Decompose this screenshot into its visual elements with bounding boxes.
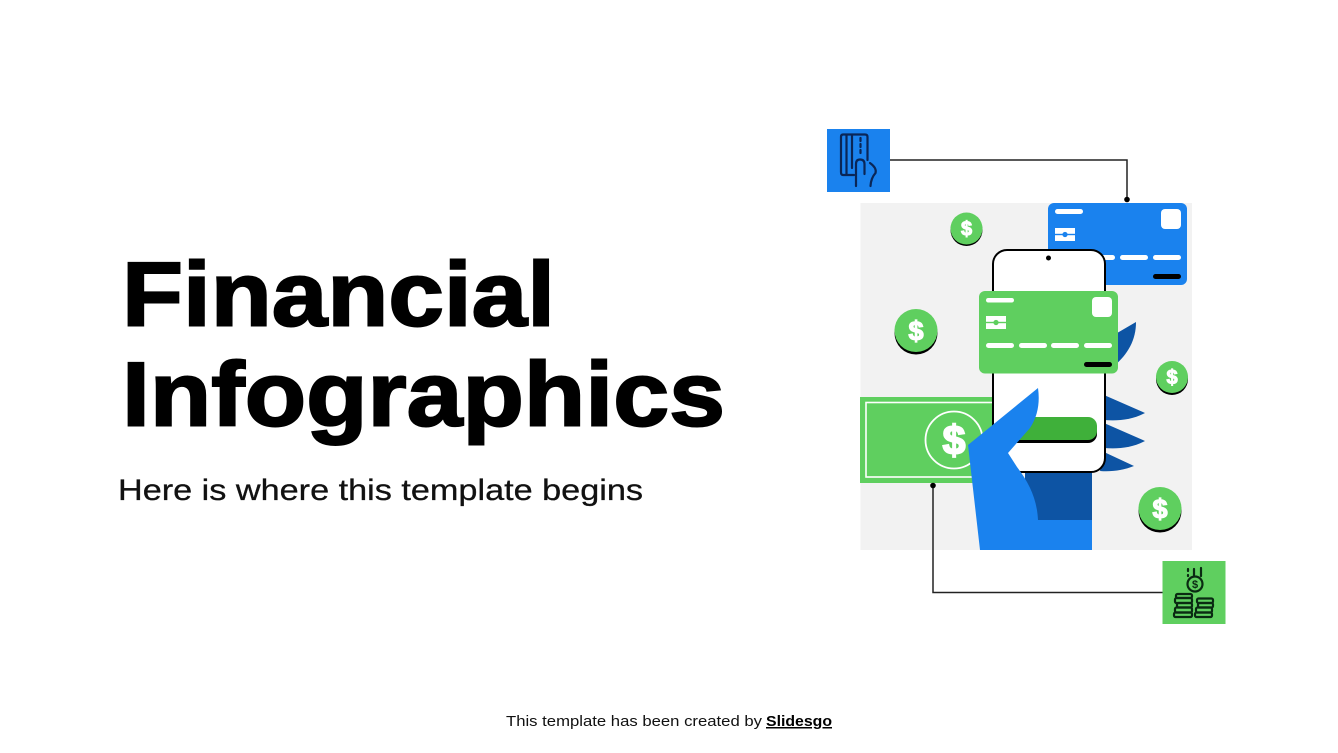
connector: card icon to blue card — [890, 160, 1130, 202]
connector: bill to coins icon — [930, 483, 1163, 592]
dark sleeve — [1025, 470, 1092, 520]
smartphone — [993, 250, 1105, 472]
subtitle: Here is where this template begins — [118, 474, 643, 507]
coin 2 — [894, 309, 938, 354]
hand fingers behind phone — [1100, 322, 1145, 471]
icon: falling coin and stacks — [1162, 561, 1226, 624]
coin 4: $ — [1152, 494, 1168, 524]
coin 3 — [1156, 361, 1188, 395]
title: Financial — [122, 244, 555, 346]
title: Infographics — [122, 344, 725, 446]
footer credit: This template has been created by — [506, 713, 763, 730]
illustration: phone payment scene — [860, 203, 1192, 550]
icon: falling coin and stacks: $ — [1192, 579, 1198, 591]
coin 3: $ — [1166, 367, 1178, 389]
icon: card and hand — [827, 129, 890, 192]
hand — [968, 388, 1092, 550]
coin 2: $ — [908, 316, 924, 346]
footer credit: Slidesgo — [766, 713, 832, 730]
coin 1: $ — [961, 218, 972, 240]
green credit card — [979, 291, 1118, 374]
coin 1 — [950, 212, 982, 246]
coin 4 — [1138, 487, 1182, 532]
dollar bill — [860, 397, 996, 483]
blue credit card — [1048, 203, 1187, 285]
background panel — [860, 203, 1192, 550]
dollar bill: $ — [943, 417, 966, 463]
title — [122, 244, 725, 446]
